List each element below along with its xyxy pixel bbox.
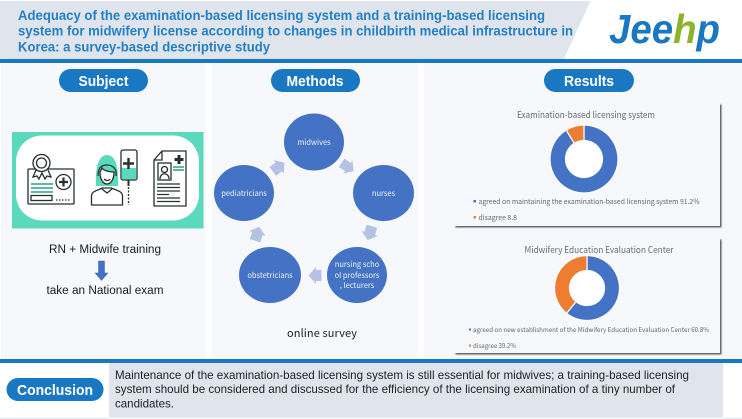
icon: certificate	[28, 154, 74, 204]
subject pill	[59, 69, 148, 92]
conclusion text	[115, 368, 689, 410]
node: midwives: midwives	[297, 137, 331, 148]
node: nursing school professors, lecturers	[327, 247, 387, 303]
conclusion pill	[6, 378, 104, 401]
methods pill: Methods	[286, 73, 344, 90]
arrow: down	[95, 261, 108, 280]
icon: midwife with drip	[92, 150, 137, 205]
text: online survey: online survey	[287, 325, 357, 341]
legend: agreed on maintaining the examination-based licensing system 91.2%	[478, 197, 700, 207]
node: nurses	[353, 165, 414, 221]
arrow: nurses to nursing school	[360, 224, 380, 243]
node: nursing school professors, lecturers: , lecturers	[340, 280, 375, 291]
subject pill: Subject	[78, 73, 128, 90]
title: Korea: a survey-based descriptive study	[18, 38, 270, 54]
logo: Jeehp: Jeehp	[609, 6, 720, 52]
text: RN + Midwife training: RN + Midwife training	[49, 244, 161, 256]
node: obstetricians	[239, 247, 301, 303]
legend	[474, 197, 700, 223]
node: pediatricians: pediatricians	[221, 188, 267, 199]
results pill	[544, 69, 634, 92]
panel: methods	[212, 63, 418, 359]
cycle diagram: survey groups	[214, 114, 414, 303]
card: midwifery education evaluation center	[454, 238, 720, 353]
methods pill	[271, 69, 360, 92]
node: obstetricians: obstetricians	[247, 270, 293, 281]
conclusion text: candidates.	[115, 396, 174, 410]
title: system for midwifery license according to changes in childbirth medical infrastructure in	[18, 22, 573, 38]
conclusion text: system should be considered and discussed for the efficiency of the licensing examination of a tiny number of	[115, 382, 676, 396]
illustration: licence, midwife, record	[12, 132, 204, 228]
arrow: midwives to nurses	[337, 156, 358, 178]
card: examination-based licensing system	[454, 103, 720, 226]
title: Adequacy of the examination-based licensing system and a training-based licensing	[18, 7, 545, 23]
band: conclusion	[0, 359, 742, 419]
legend: disagree 39.2%	[473, 340, 516, 350]
chart title: Examination-based licensing system	[517, 108, 655, 121]
conclusion pill: Conclusion	[17, 382, 93, 399]
arrow: pediatricians to midwives	[268, 156, 290, 178]
donut chart	[550, 125, 618, 193]
chart title: Midwifery Education Evaluation Center	[524, 243, 674, 256]
arrow: nursing school to obstetricians	[308, 267, 322, 284]
results pill: Results	[564, 73, 614, 90]
conclusion text: Maintenance of the examination-based licensing system is still essential for midwives; a training-based licensing	[115, 368, 689, 382]
header band	[0, 0, 742, 63]
title	[18, 7, 573, 54]
node: nursing school professors, lecturers: nursing scho	[335, 259, 380, 270]
legend	[469, 324, 709, 350]
legend: agreed on new establishment of the Midwifery Education Evaluation Center 60.8%	[473, 324, 709, 334]
text: take an National exam: take an National exam	[46, 285, 164, 297]
donut chart	[555, 256, 620, 320]
node: pediatricians	[214, 165, 274, 221]
panel: results	[424, 63, 742, 359]
legend: disagree 8.8	[478, 213, 517, 223]
node: midwives	[284, 114, 344, 170]
node: nursing school professors, lecturers: ol professors	[335, 270, 380, 281]
panel: subject	[1, 63, 206, 359]
icon: personal record	[154, 151, 186, 206]
node: nurses: nurses	[372, 188, 396, 199]
arrow: obstetricians to pediatricians	[247, 224, 267, 243]
